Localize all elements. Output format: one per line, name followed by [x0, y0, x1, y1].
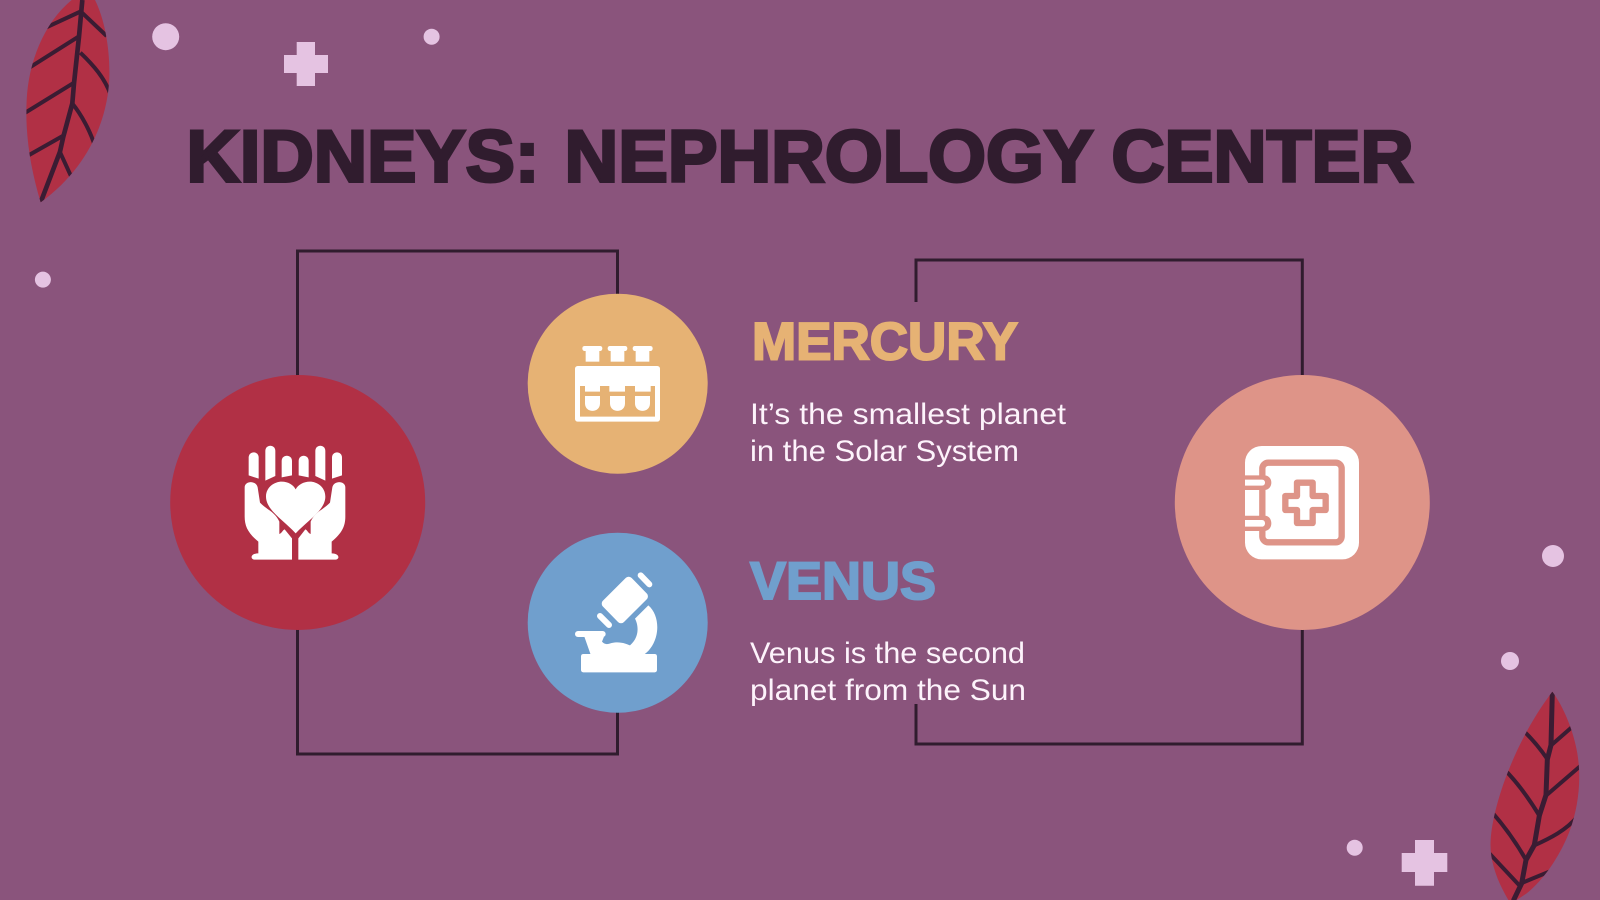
text: Venus description	[750, 637, 1026, 707]
icon: plus bottom right	[1402, 840, 1447, 886]
icon: plus top	[284, 42, 328, 86]
circle icon: medical notebook	[1175, 375, 1430, 630]
circle icon: hands holding heart	[170, 375, 425, 630]
circle icon: test tubes	[528, 294, 708, 474]
title: KIDNEYS:	[186, 116, 540, 198]
connector: right frame	[916, 260, 1302, 744]
title: NEPHROLOGY	[564, 116, 1094, 198]
icon: red leaf top left	[25, 0, 111, 202]
decorative dots right	[1347, 545, 1564, 856]
title	[186, 116, 1414, 198]
title: CENTER	[1112, 116, 1414, 198]
heading: Venus: VENUS	[750, 552, 936, 611]
icon: red leaf bottom right	[1489, 692, 1583, 900]
text: Mercury description: in the Solar System	[750, 435, 1019, 468]
heading: Mercury: MERCURY	[752, 313, 1018, 372]
decorative dots top left	[35, 23, 440, 288]
connector: left frame	[298, 251, 618, 754]
text: Venus description: planet from the Sun	[750, 674, 1026, 707]
circle icon: microscope	[528, 533, 708, 713]
text: Mercury description	[750, 398, 1067, 468]
text: Mercury description: It’s the smallest planet	[750, 398, 1067, 431]
text: Venus description: Venus is the second	[750, 637, 1025, 670]
